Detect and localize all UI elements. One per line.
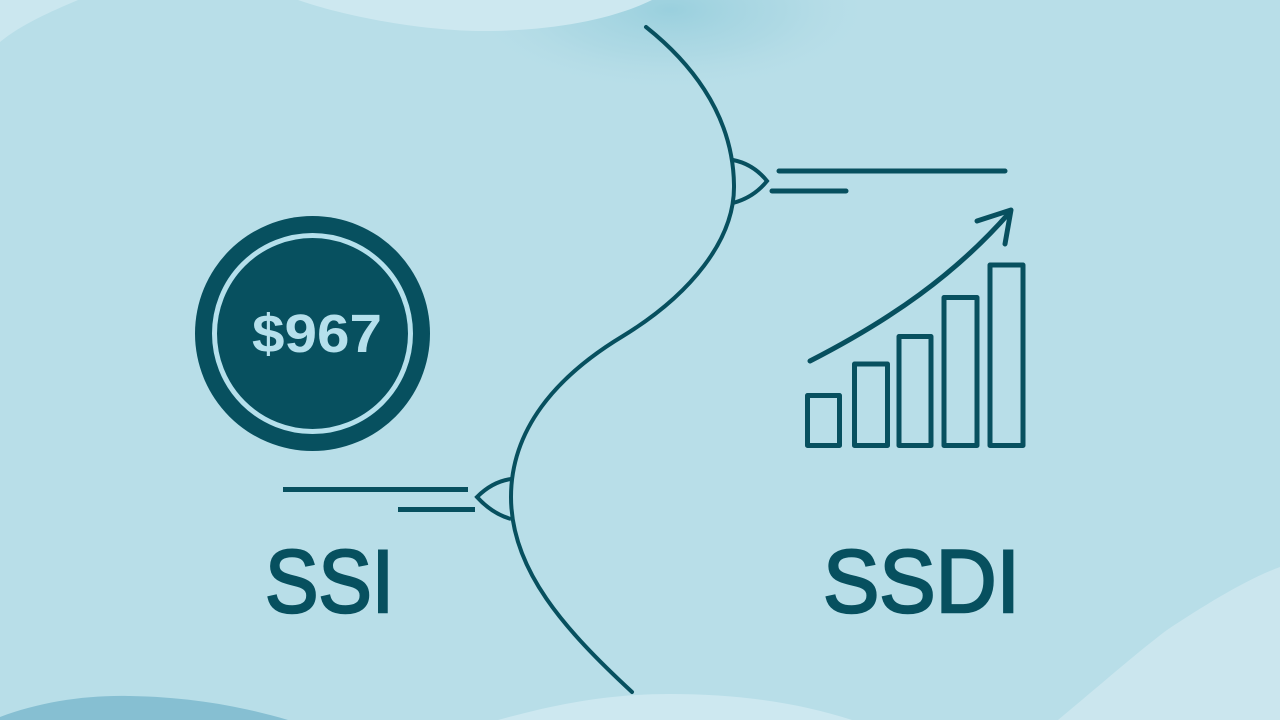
panel: SSI bbox=[195, 216, 511, 631]
callout lines: SSDI bbox=[772, 171, 1005, 191]
callout lines: SSI bbox=[283, 490, 475, 510]
badge: $967 amount bbox=[195, 216, 430, 451]
heading: SSDI: SSDI bbox=[823, 531, 1020, 631]
background glow near top of divider bbox=[460, 0, 880, 95]
blob: top centre bbox=[298, 0, 652, 31]
blob: bottom left bbox=[0, 696, 288, 720]
badge: $967 amount: $967 bbox=[252, 304, 382, 364]
connector: SSI wedge bbox=[477, 479, 511, 519]
panel: SSDI bbox=[733, 160, 1023, 631]
blob: bottom right bbox=[1058, 567, 1280, 720]
blob: bottom centre bbox=[498, 694, 852, 720]
connector: SSDI wedge bbox=[733, 160, 767, 203]
heading: SSI: SSI bbox=[265, 531, 394, 631]
blob: top left bbox=[0, 0, 78, 42]
divider curve bbox=[511, 27, 734, 692]
bar chart: rising benefits bbox=[808, 265, 1023, 446]
arrow: upward trend bbox=[810, 210, 1011, 361]
